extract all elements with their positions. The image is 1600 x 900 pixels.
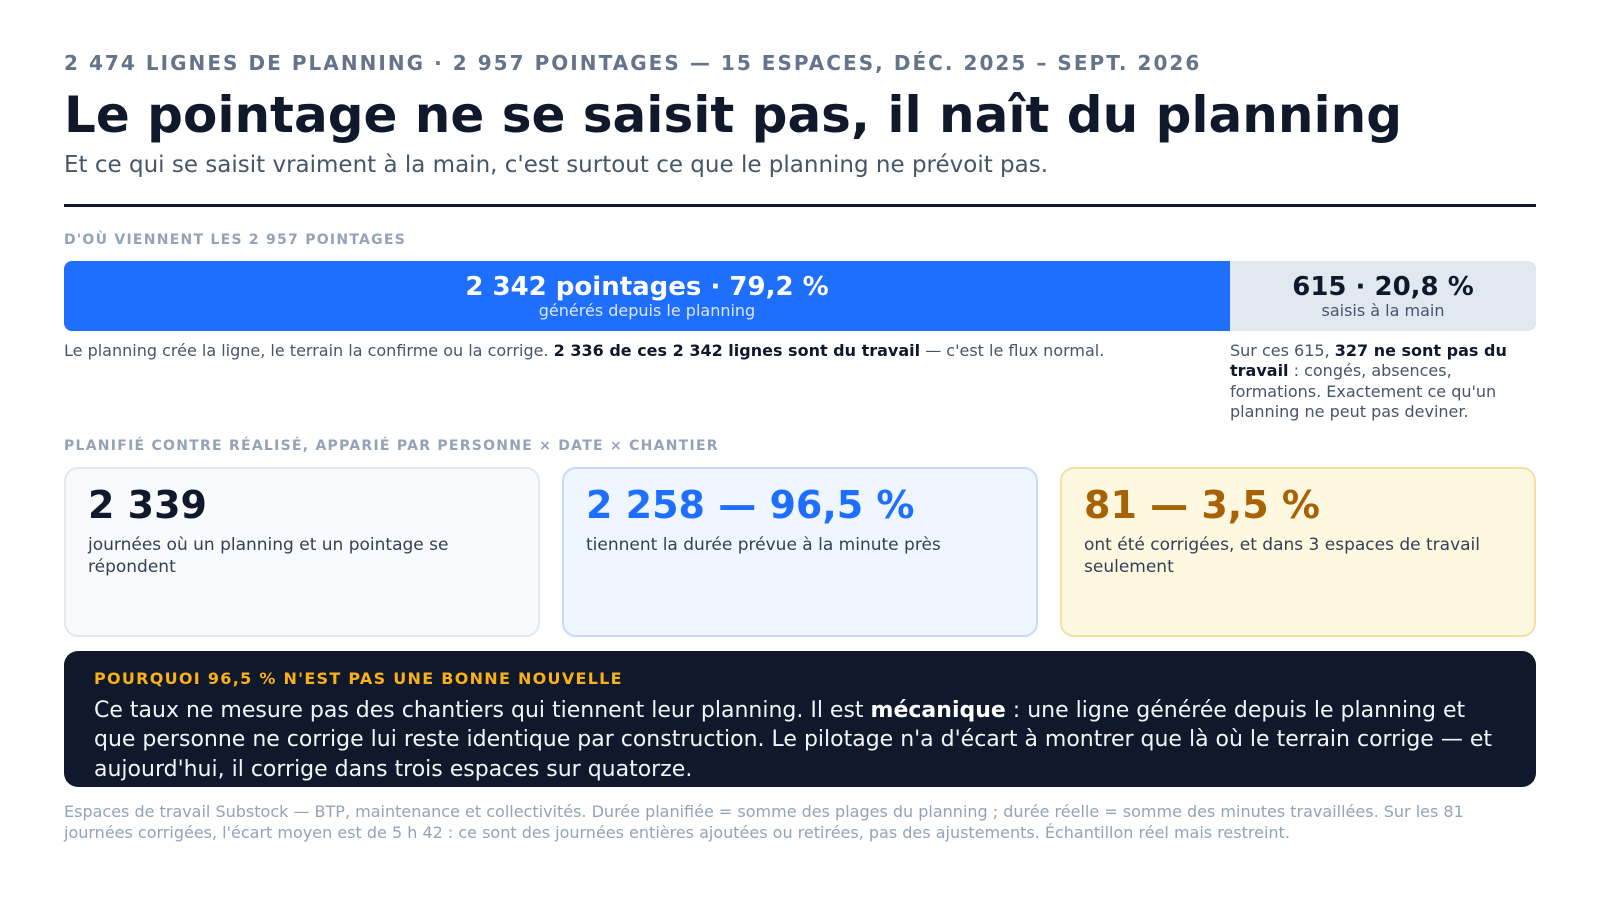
bar segment: generated from planning — [64, 261, 1230, 331]
note: planning flow: Le planning crée la ligne, le terrain la confirme ou la corrige. 2 336 de ces 2 342 lignes sont du travail — c'est le flux normal. — [64, 341, 1104, 360]
stacked bar — [64, 261, 1536, 331]
bar segment: entered by hand: saisis à la main — [1322, 301, 1444, 320]
eyebrow: 2 474 LIGNES DE PLANNING · 2 957 POINTAGES — 15 ESPACES, DÉC. 2025 – SEPT. 2026 — [64, 51, 1201, 75]
section label: planned vs actual: PLANIFIÉ CONTRE RÉALISÉ, APPARIÉ PAR PERSONNE × DATE × CHANTIER — [64, 438, 719, 454]
bar segment: generated from planning: 2 342 pointages · 79,2 % — [465, 272, 829, 302]
card: on-time share — [562, 467, 1038, 637]
subtitle: Et ce qui se saisit vraiment à la main, c'est surtout ce que le planning ne prévoit pas. — [64, 152, 1048, 178]
card: corrected share — [1060, 467, 1536, 637]
bar segment: entered by hand — [1292, 272, 1474, 320]
card: matched days: 2 339 — [88, 483, 207, 527]
card: corrected share: 81 — 3,5 % — [1084, 483, 1320, 527]
card: matched days: journées où un planning et un pointage se répondent — [88, 535, 448, 577]
card: matched days — [64, 467, 540, 637]
callout body: Ce taux ne mesure pas des chantiers qui tiennent leur planning. Il est mécanique : une ligne générée depuis le planning et que personne ne corrige lui reste identique par construction. Le pilotage n'a d'écart à montrer que là où le terrain corrige — et aujourd'hui, il corrige dans trois espaces sur quatorze. — [94, 698, 1492, 782]
card: on-time share: tiennent la durée prévue à la minute près — [586, 535, 941, 555]
callout: why 96.5% is not good news — [64, 651, 1536, 787]
card: on-time share: 2 258 — 96,5 % — [586, 483, 915, 527]
bar segment: generated from planning: générés depuis le planning — [539, 301, 755, 320]
card: corrected share: ont été corrigées, et dans 3 espaces de travail seulement — [1084, 535, 1480, 577]
footnote: Espaces de travail Substock — BTP, maintenance et collectivités. Durée planifiée = somme des plages du planning ; durée réelle = somme des minutes travaillées. Sur les 81 journées corrigées, l'écart moyen est de 5 h 42 : ce sont des journées entières ajoutées ou retirées, pas des ajustements. Échantillon réel mais restreint. — [64, 802, 1464, 842]
title: Le pointage ne se saisit pas, il naît du planning — [64, 86, 1402, 144]
section label: origin of pointages: D'OÙ VIENNENT LES 2 957 POINTAGES — [64, 232, 406, 248]
callout heading: POURQUOI 96,5 % N'EST PAS UNE BONNE NOUVELLE — [94, 669, 623, 688]
note: manual entries: Sur ces 615, 327 ne sont pas du travail : congés, absences, formations. Exactement ce qu'un planning ne peut pas deviner. — [1230, 341, 1507, 421]
bar segment: entered by hand: 615 · 20,8 % — [1292, 272, 1474, 302]
